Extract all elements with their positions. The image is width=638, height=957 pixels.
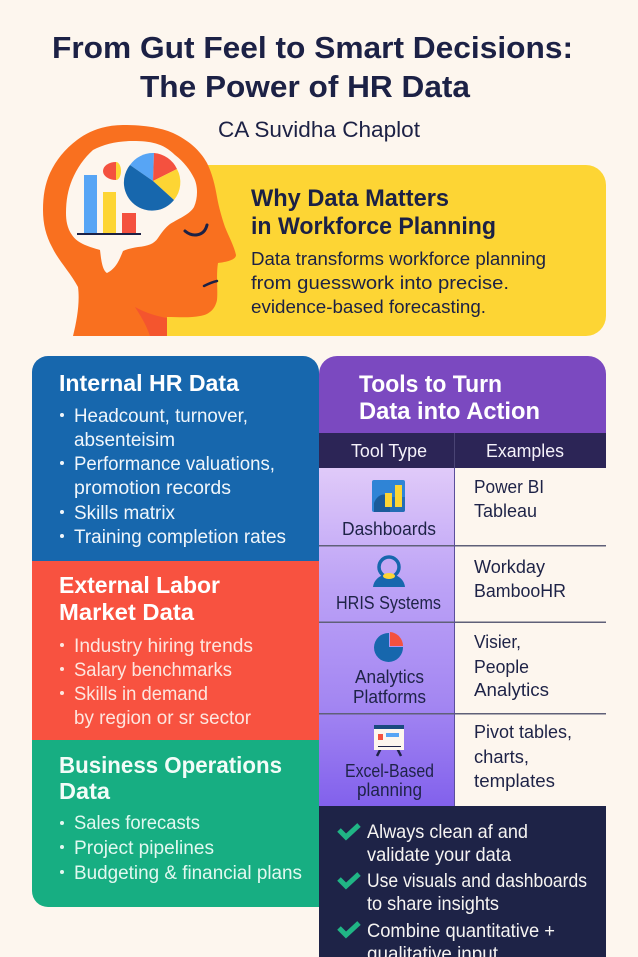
row: excel-based planning: templates: [474, 770, 555, 791]
text: why data matters: [251, 248, 546, 317]
pie chart: [124, 153, 180, 211]
heading: Business Operations: [59, 752, 282, 778]
panel: business operations data: [32, 740, 319, 907]
row: analytics platforms: [353, 631, 549, 707]
table: tools: [319, 433, 606, 806]
bar chart: [77, 175, 141, 235]
table header: Tool Type: [351, 440, 427, 461]
row: dashboards: Power BI: [474, 476, 544, 497]
heading: Internal HR Data: [59, 370, 239, 396]
table header: Examples: [486, 440, 564, 461]
panel: best practices: [319, 806, 606, 957]
icon: check marks: [339, 825, 359, 935]
checklist text: Use visuals and dashboards: [367, 870, 587, 892]
author: CA Suvidha Chaplot: [218, 117, 420, 142]
eye: [185, 225, 207, 235]
title: [52, 30, 573, 104]
title: The Power of HR Data: [140, 69, 471, 104]
heading: [59, 572, 220, 625]
checklist text: Always clean af and: [367, 821, 528, 843]
heading: [59, 752, 282, 804]
text: why data matters: from guesswork into precise.: [251, 272, 509, 293]
bullet list: Project pipelines: [74, 838, 214, 859]
mouth: [204, 281, 217, 286]
small pie: [103, 162, 121, 180]
icon: presentation board: [374, 725, 404, 756]
bullet list: by region or sr sector: [74, 708, 252, 729]
bullet list: [60, 636, 253, 729]
row: excel-based planning: [345, 721, 572, 800]
neck shadow: [135, 307, 167, 336]
bullet list: [60, 406, 286, 548]
heading: why data matters: Why Data Matters: [251, 185, 449, 212]
heading: [359, 371, 540, 425]
checklist text: to share insights: [367, 893, 499, 915]
text: why data matters: evidence-based forecasting.: [251, 296, 486, 317]
row: excel-based planning: Excel-Based: [345, 761, 434, 781]
bullet list: Industry hiring trends: [74, 636, 253, 657]
checklist text: [367, 821, 587, 957]
bullet list: Budgeting & financial plans: [74, 863, 302, 884]
row: analytics platforms: Analytics: [474, 679, 549, 700]
icon: dashboard: [372, 480, 405, 512]
row: dashboards: [342, 476, 544, 539]
heading: Data: [59, 778, 110, 804]
bullet list: Sales forecasts: [74, 813, 200, 834]
table header: [319, 433, 606, 468]
bullet list: Headcount, turnover,: [74, 406, 248, 427]
heading: Tools to Turn: [359, 371, 502, 398]
row: analytics platforms: Platforms: [353, 687, 426, 707]
row: excel-based planning: Pivot tables,: [474, 721, 572, 742]
row: HRIS systems: [336, 556, 566, 613]
panel: tools header: [319, 356, 606, 433]
row: excel-based planning: planning: [357, 780, 422, 800]
heading: External Labor: [59, 572, 220, 598]
bullet list: Skills matrix: [74, 503, 175, 524]
title: From Gut Feel to Smart Decisions:: [52, 30, 573, 65]
heading: why data matters: [251, 185, 496, 240]
row: excel-based planning: charts,: [474, 746, 529, 767]
row: dashboards: Tableau: [474, 500, 537, 521]
bullet list: Training completion rates: [74, 527, 286, 548]
icon: person: [373, 557, 405, 587]
row: HRIS systems: HRIS Systems: [336, 593, 441, 613]
bullet list: [60, 813, 302, 884]
bullet list: Salary benchmarks: [74, 660, 232, 681]
row: analytics platforms: People: [474, 656, 529, 677]
row: analytics platforms: Analytics: [355, 667, 424, 687]
bullet list: Performance valuations,: [74, 454, 275, 475]
heading: Data into Action: [359, 398, 540, 425]
heading: Market Data: [59, 599, 194, 625]
panel: external labor market data: [32, 561, 319, 740]
bullet list: absenteisim: [74, 430, 175, 451]
checklist text: Combine quantitative +: [367, 920, 555, 942]
icon: pie chart: [374, 632, 403, 662]
bullet list: Skills in demand: [74, 684, 208, 705]
panel: internal HR data: [32, 356, 319, 561]
row: analytics platforms: Visier,: [474, 631, 521, 652]
row: HRIS systems: Workday: [474, 556, 546, 577]
heading: why data matters: in Workforce Planning: [251, 213, 496, 240]
bullet list: promotion records: [74, 478, 231, 499]
panel: why data matters: [160, 165, 606, 336]
checklist text: validate your data: [367, 844, 511, 866]
text: why data matters: Data transforms workforce planning: [251, 248, 546, 269]
row: dashboards: Dashboards: [342, 519, 436, 539]
brain bubble: [66, 141, 197, 273]
icon: head with charts: [43, 125, 236, 336]
row: HRIS systems: BambooHR: [474, 580, 566, 601]
